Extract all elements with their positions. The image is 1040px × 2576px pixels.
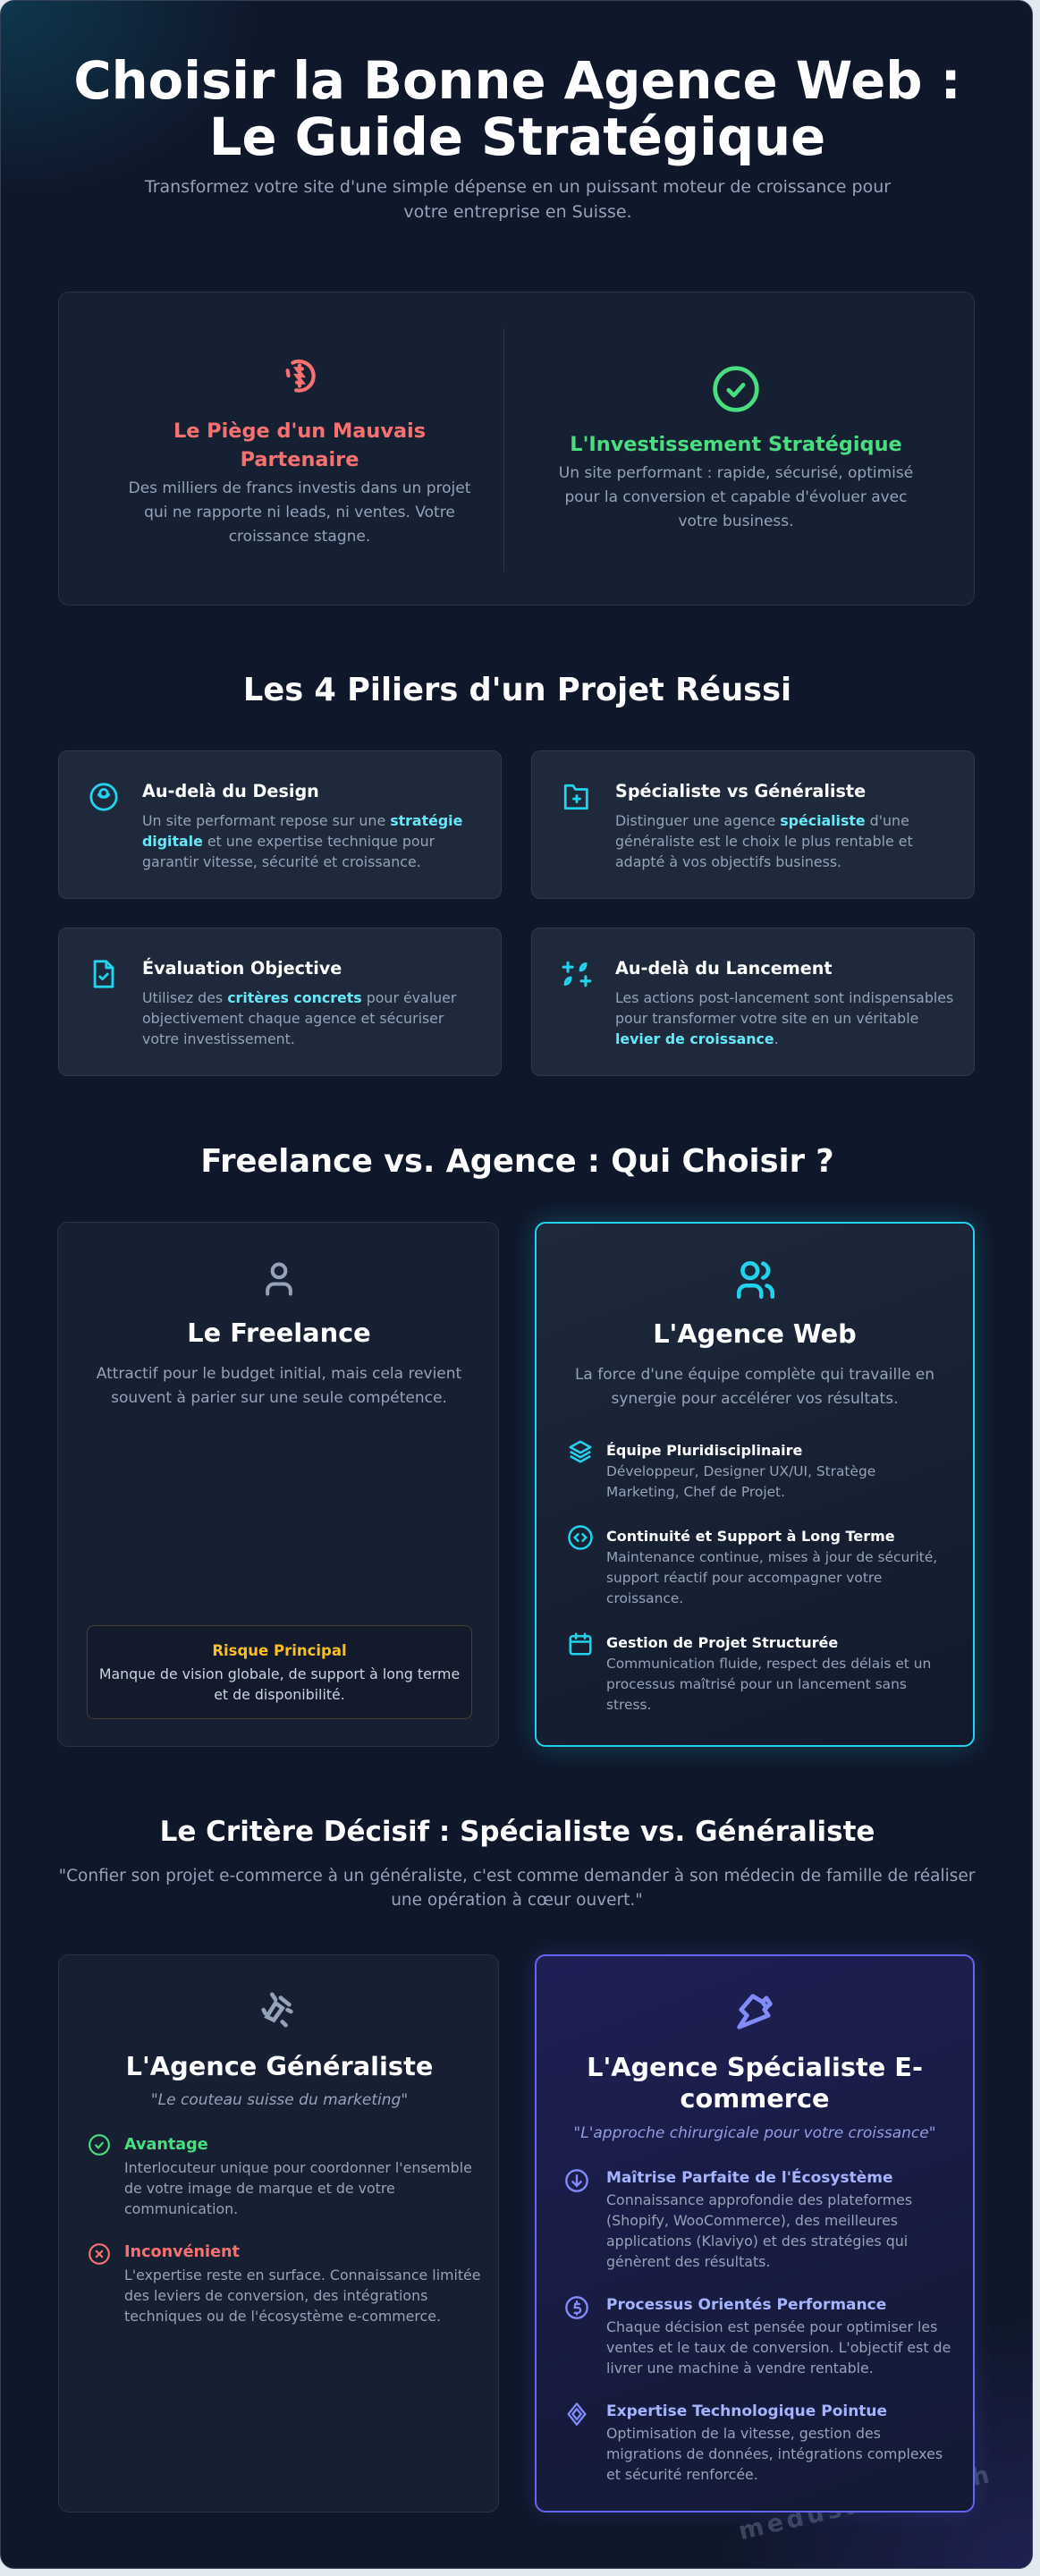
pillar: evaluation: Utilisez des critères concrets pour évaluer objectivement chaque agence et sécuriser votre investissement.	[142, 989, 456, 1047]
panel: spécialiste: Chaque décision est pensée pour optimiser les ventes et le taux de conversion. L'objectif est de livrer une machine à vendre rentable.	[606, 2318, 951, 2377]
panel: agence web	[535, 1222, 975, 1747]
pillar: design: Au-delà du Design	[142, 781, 319, 801]
panel: agence web: Gestion de Projet Structurée	[606, 1634, 838, 1651]
item: inconvénient	[89, 2243, 481, 2325]
pillar: evaluation	[58, 928, 502, 1076]
text: strategic investment: Un site performant : rapide, sécurisé, optimisé pour la conversion et capable d'évoluer avec votre business.	[559, 464, 913, 530]
panel: agence web: Continuité et Support à Long Terme	[606, 1528, 895, 1545]
text: bad partner: Le Piège d'un Mauvais Partenaire	[173, 419, 426, 471]
pillar: launch: Au-delà du Lancement	[615, 958, 833, 979]
panel: agence web: Développeur, Designer UX/UI, Stratège Marketing, Chef de Projet.	[606, 1463, 875, 1500]
pillar: design	[58, 750, 502, 899]
panel: spécialiste: Maîtrise Parfaite de l'Écosystème	[606, 2169, 892, 2187]
title: L'Agence Spécialiste E-	[587, 2052, 923, 2082]
title	[587, 2052, 923, 2114]
panel: agence web: Équipe Pluridisciplinaire	[606, 1442, 802, 1459]
pillar: evaluation: Évaluation Objective	[142, 958, 342, 979]
desc: La force d'une équipe complète qui travaille en synergie pour accélérer vos résultats.	[575, 1366, 934, 1408]
text: bad partner	[129, 419, 470, 546]
callout: risk	[87, 1625, 472, 1719]
panel: problem vs solution	[58, 292, 975, 606]
item: avantage	[89, 2134, 472, 2217]
icon: tools	[261, 1993, 293, 2027]
panel: freelance	[57, 1222, 499, 1747]
quote: "Confier son projet e-commerce à un généraliste, c'est comme demander à son médecin de famille de réaliser une opération à cœur ouvert."	[59, 1867, 975, 1910]
item: project management	[569, 1633, 931, 1713]
item: tech	[567, 2402, 943, 2483]
item: support	[568, 1525, 937, 1606]
pillar: launch	[531, 928, 975, 1076]
item: performance	[565, 2296, 951, 2377]
item: avantage: Interlocuteur unique pour coordonner l'ensemble de votre image de marque et de votre communication.	[124, 2159, 472, 2217]
panel: généraliste	[58, 1954, 499, 2512]
item: inconvénient: L'expertise reste en surface. Connaissance limitée des leviers de conversion, des intégrations techniques ou de l'écosystème e-commerce.	[124, 2267, 481, 2325]
text: strategic investment	[559, 433, 913, 530]
item: inconvénient: Inconvénient	[124, 2243, 240, 2261]
title: L'Agence Web	[653, 1318, 857, 1349]
pillar: specialist	[531, 750, 975, 899]
pillar: launch: Les actions post-lancement sont indispensables pour transformer votre site en un véritable levier de croissance.	[615, 989, 953, 1047]
icon: money trap	[286, 360, 316, 393]
heading: freelance vs agence: Freelance vs. Agence : Qui Choisir ?	[200, 1143, 834, 1180]
icon: check circle	[713, 366, 759, 412]
callout: risk: Risque Principal	[212, 1642, 347, 1659]
panel: spécialiste: Expertise Technologique Pointue	[606, 2402, 887, 2420]
heading: 4 piliers: Les 4 Piliers d'un Projet Réussi	[243, 672, 791, 708]
title: Le Guide Stratégique	[209, 107, 825, 167]
heading: critère décisif: Le Critère Décisif : Spécialiste vs. Généraliste	[160, 1816, 875, 1848]
title: commerce	[680, 2083, 830, 2114]
item: team	[569, 1440, 875, 1500]
pillar: specialist: Distinguer une agence spécialiste d'une généraliste est le choix le plus rentable et adapté à vos objectifs business.	[615, 812, 913, 870]
tagline: "L'approche chirurgicale pour votre croissance"	[573, 2124, 936, 2142]
icon: user	[266, 1263, 292, 1295]
pillar: design: Un site performant repose sur une stratégie digitale et une expertise technique pour garantir vitesse, sécurité et croissance.	[142, 812, 462, 870]
text: bad partner: Des milliers de francs investis dans un projet qui ne rapporte ni leads, ni ventes. Votre croissance stagne.	[129, 479, 470, 546]
panel: agence web: Maintenance continue, mises à jour de sécurité, support réactif pour accompagner votre croissance.	[606, 1549, 937, 1606]
title	[73, 51, 961, 167]
panel: spécialiste: Processus Orientés Performance	[606, 2296, 886, 2314]
title: L'Agence Généraliste	[126, 2051, 433, 2081]
icon: scalpel	[737, 1994, 773, 2029]
panel: agence web: Communication fluide, respect des délais et un processus maîtrisé pour un lancement sans stress.	[606, 1656, 931, 1713]
callout: risk: Manque de vision globale, de support à long terme et de disponibilité.	[99, 1665, 460, 1703]
text: strategic investment: L'Investissement Stratégique	[570, 433, 902, 456]
tagline: "Le couteau suisse du marketing"	[151, 2091, 408, 2109]
icon: users	[737, 1261, 774, 1299]
title: Choisir la Bonne Agence Web :	[73, 51, 961, 111]
pillar: specialist: Spécialiste vs Généraliste	[615, 781, 866, 801]
watermark: medusa-web.ch	[736, 2461, 995, 2546]
panel: spécialiste: Connaissance approfondie des plateformes (Shopify, WooCommerce), des meilleures applications (Klaviyo) et des stratégies qui génèrent des résultats.	[606, 2191, 912, 2270]
item: avantage: Avantage	[124, 2136, 208, 2154]
panel: spécialiste: Optimisation de la vitesse, gestion des migrations de données, intégrations complexes et sécurité renforcée.	[606, 2425, 943, 2483]
subtitle: Transformez votre site d'une simple dépense en un puissant moteur de croissance pour votre entreprise en Suisse.	[145, 177, 891, 222]
desc: Attractif pour le budget initial, mais cela revient souvent à parier sur une seule compétence.	[97, 1365, 461, 1407]
panel: spécialiste	[535, 1954, 975, 2512]
title: Le Freelance	[187, 1318, 371, 1348]
item: écosystème	[565, 2168, 912, 2270]
